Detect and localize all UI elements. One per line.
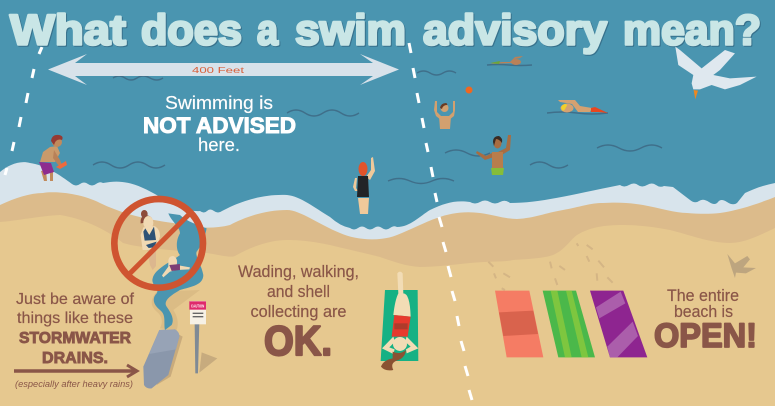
toddler in puddle (162, 256, 190, 277)
text: entire beach open: OPEN! (654, 317, 757, 355)
text: entire beach open: beach is (674, 303, 733, 321)
text: stormwater drains: STORMWATER (19, 330, 131, 347)
arrow: 400 feet (48, 54, 399, 85)
text: stormwater drains: (especially after heavy rains) (15, 379, 133, 389)
title: a (257, 6, 279, 54)
purple towel (590, 291, 647, 357)
ball (466, 86, 472, 94)
figure: woman wading (353, 157, 375, 214)
red towel (495, 291, 543, 357)
title: swim (295, 6, 406, 54)
figure: boy on the foam (39, 135, 67, 181)
caution sign (189, 301, 217, 373)
green towel (543, 291, 595, 357)
stormwater stream (152, 290, 200, 330)
title: does (141, 6, 242, 54)
text: swimming not advised (143, 93, 296, 155)
sunbather on towel (381, 272, 418, 370)
text: entire beach open (654, 287, 757, 355)
arrow label: 400 Feet (192, 65, 245, 75)
arrow to drain (14, 365, 137, 377)
woman in bikini (141, 210, 160, 270)
green towel (381, 290, 418, 361)
text: entire beach open: The entire (667, 287, 739, 305)
text: stormwater drains: things like these (17, 310, 133, 327)
text: wading ok: OK. (264, 317, 332, 364)
text: stormwater drains (15, 291, 135, 389)
caution sign: CAUTION (191, 304, 205, 309)
shoreline foam (0, 162, 775, 406)
title: advisory (423, 6, 607, 54)
beach towels and footprints (488, 243, 756, 357)
waves (93, 64, 662, 184)
text: swimming not advised: Swimming is (165, 93, 273, 113)
figure: person with raised arms (434, 101, 455, 129)
figure: swimmer near (558, 100, 608, 113)
text: wading ok: and shell (267, 283, 330, 301)
text: stormwater drains: DRAINS. (42, 350, 108, 367)
text: wading ok: collecting are (250, 303, 346, 321)
sunbather (381, 272, 418, 370)
icon: seagull (675, 47, 757, 99)
text: wading ok (238, 263, 359, 364)
text: swimming not advised: NOT ADVISED (143, 113, 296, 138)
right dashed boundary line (409, 43, 472, 400)
figure: swimmer far (490, 56, 523, 65)
title: mean? (623, 6, 761, 54)
title: What (10, 6, 126, 54)
wet sand (0, 192, 775, 406)
left dashed boundary line (5, 47, 42, 175)
footprints (488, 243, 613, 290)
text: wading ok: Wading, walking, (238, 263, 359, 281)
stormwater drain pipe (143, 329, 183, 389)
stormwater drain scene (114, 199, 217, 389)
title (10, 6, 761, 54)
figure: person waving (476, 135, 511, 175)
seagull shadow (727, 254, 756, 278)
text: swimming not advised: here. (198, 135, 240, 155)
text: stormwater drains: Just be aware of (16, 291, 135, 308)
dry sand (0, 215, 775, 406)
prohibition sign (114, 199, 203, 288)
